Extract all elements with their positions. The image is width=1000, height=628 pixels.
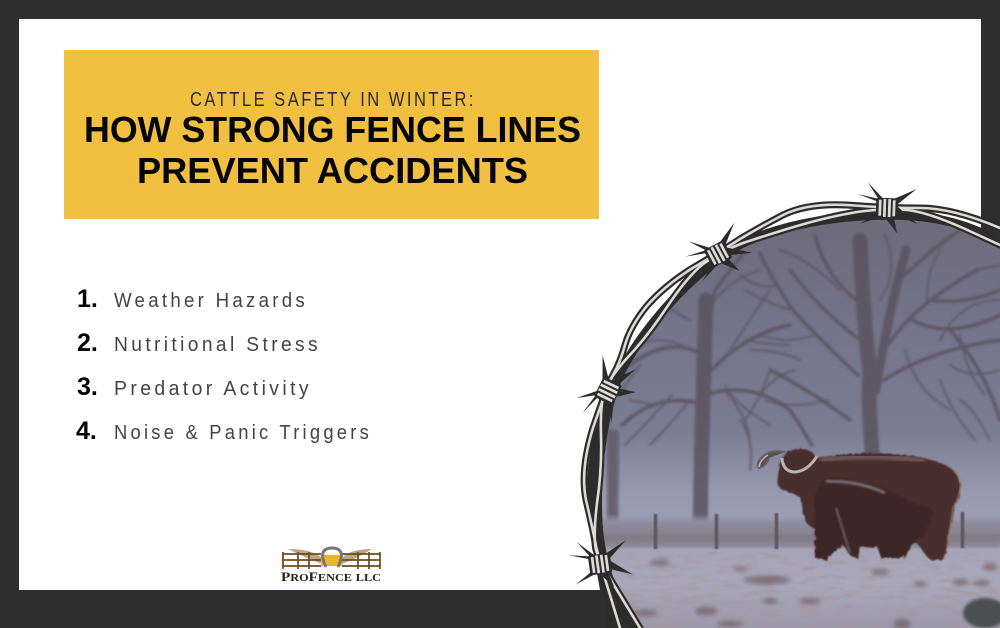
horseshoe bbox=[323, 548, 341, 567]
item 2: Nutritional Stress bbox=[114, 334, 321, 356]
headline line one: HOW STRONG FENCE LINES bbox=[84, 109, 581, 150]
yellow plate bbox=[321, 555, 342, 566]
barb left bbox=[572, 351, 645, 430]
item 4: Noise & Panic Triggers bbox=[114, 422, 372, 444]
barb lower left bbox=[567, 535, 634, 593]
foggy sky bbox=[590, 210, 1000, 540]
numbered list bbox=[76, 285, 372, 445]
photo: highland cattle in winter fog bbox=[590, 210, 1000, 628]
item 3: Predator Activity bbox=[114, 378, 312, 400]
item 2: 2. bbox=[77, 329, 98, 357]
calf leg highlight bbox=[836, 508, 850, 553]
barbed wire bbox=[567, 182, 1000, 628]
horn highlight bbox=[759, 455, 768, 467]
logo wordmark: PROFENCE LLC bbox=[281, 569, 381, 584]
title banner bbox=[64, 50, 599, 219]
fence posts bbox=[656, 512, 962, 549]
tree, far left bbox=[607, 430, 619, 545]
item 3: 3. bbox=[77, 373, 98, 401]
barb top bbox=[856, 182, 919, 234]
ground bbox=[590, 514, 1000, 628]
orange rim light bbox=[947, 470, 960, 547]
barb upper left bbox=[680, 217, 757, 290]
fence rails bbox=[282, 552, 380, 569]
item 1: Weather Hazards bbox=[114, 290, 308, 312]
logo: ProFence LLC bbox=[281, 548, 381, 584]
horn bbox=[758, 451, 785, 468]
hay-coloured blotches bbox=[632, 560, 997, 628]
item 1: 1. bbox=[77, 285, 98, 313]
wire strands bbox=[584, 205, 1000, 628]
distant tree, left bbox=[620, 255, 812, 545]
item 3 bbox=[77, 373, 312, 401]
item 1 bbox=[77, 285, 308, 313]
horizon haze streaks bbox=[604, 538, 1000, 548]
subtitle: CATTLE SAFETY IN WINTER: bbox=[190, 89, 476, 111]
frost speckles bbox=[590, 552, 1000, 628]
item 4: 4. bbox=[76, 417, 97, 445]
dark band behind photo bbox=[602, 220, 1000, 628]
longhorns bbox=[288, 549, 372, 564]
headline line two: PREVENT ACCIDENTS bbox=[137, 150, 528, 191]
distant tree, right bbox=[740, 230, 1000, 452]
back frost highlight bbox=[820, 457, 925, 461]
mossy rock bbox=[963, 598, 1000, 628]
item 4 bbox=[76, 417, 372, 445]
calf frost bbox=[826, 481, 885, 493]
dark fill between wires bbox=[587, 395, 625, 628]
adult cow bbox=[758, 449, 960, 560]
horn ring bbox=[782, 456, 817, 472]
item 2 bbox=[77, 329, 321, 357]
calf bbox=[815, 478, 933, 560]
